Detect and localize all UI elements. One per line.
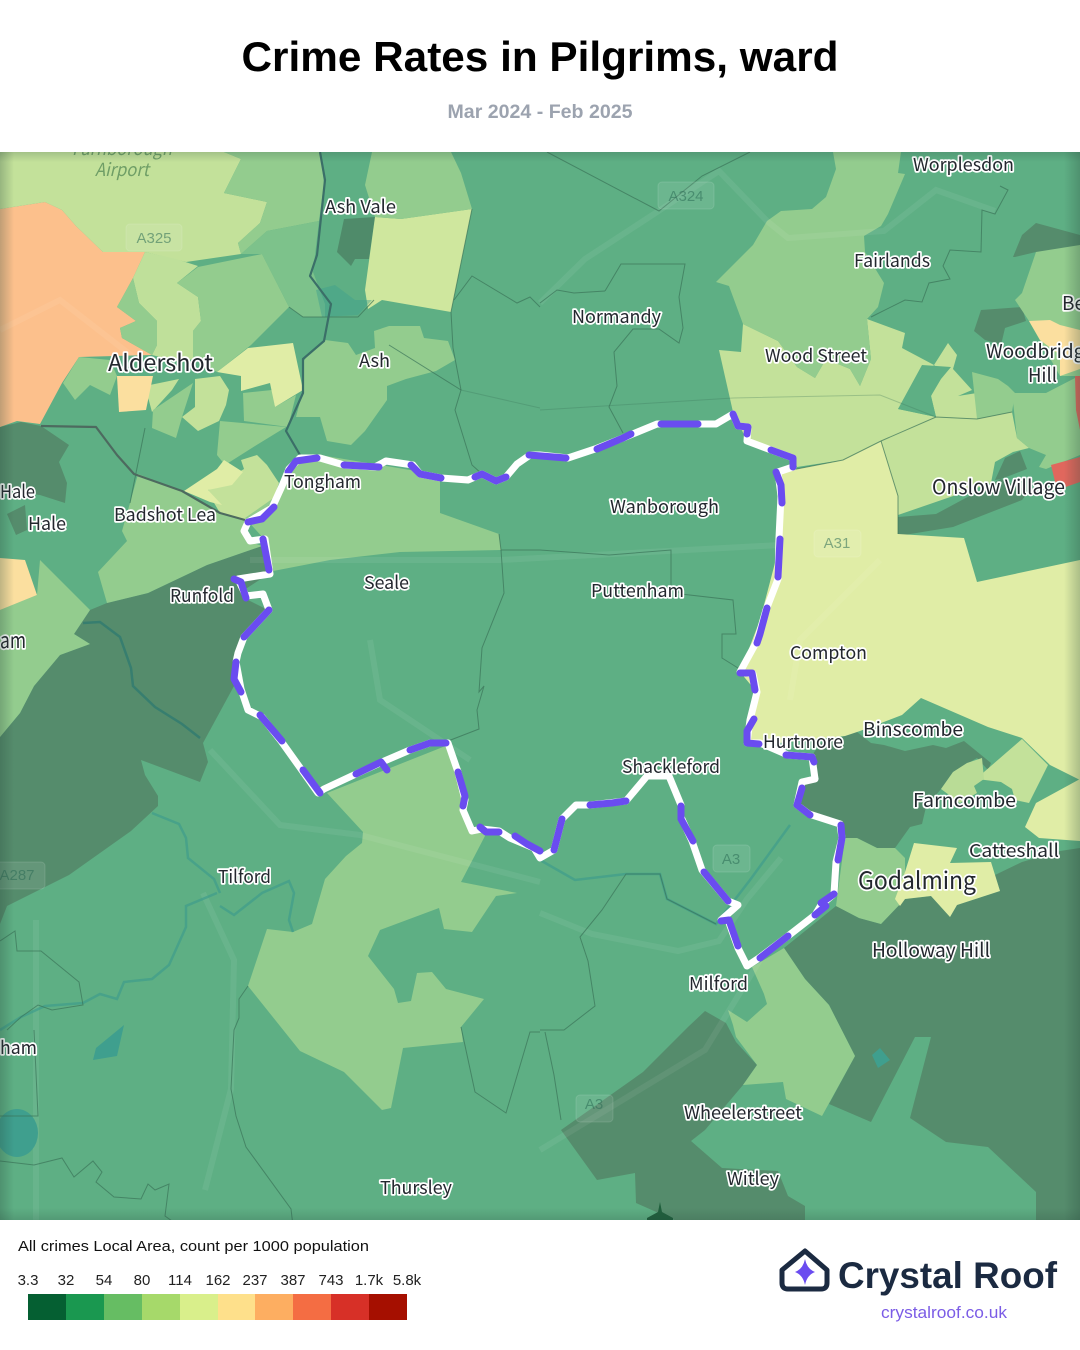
map: roads (0, 171, 995, 1220)
map: ward boundary lines (0, 152, 1012, 1226)
map: place labels (0, 151, 1080, 1200)
map: place labels: Wood Street (765, 342, 867, 368)
map: place labels: Binscombe (863, 715, 963, 742)
logo: Crystal Roof (782, 1251, 1058, 1322)
map: rivers and ponds (0, 285, 890, 1157)
map: area shading by crime rate (0, 152, 1080, 1226)
legend tick labels: 743 (318, 1272, 344, 1289)
legend tick labels: 162 (205, 1272, 231, 1289)
map: place labels: Fairlands (854, 247, 930, 273)
legend tick labels: 237 (242, 1272, 268, 1289)
legend tick labels: 54 (96, 1272, 112, 1289)
map: place labels: Normandy (572, 303, 662, 329)
icon: house with star (782, 1251, 827, 1289)
map: county boundary (41, 152, 331, 520)
map: place labels: Farncombe (913, 786, 1016, 813)
map: road number shields: A325 (136, 230, 172, 247)
map: road number shields (0, 182, 861, 1122)
map: road number shields: A287 (0, 867, 35, 884)
map: place labels: Catteshall (969, 837, 1059, 863)
map: place labels: Ash Vale (325, 193, 396, 219)
map: place labels: Hale (28, 510, 66, 536)
map: road number shields: A3 (722, 851, 740, 868)
map: place labels: Compton (790, 639, 867, 665)
legend tick labels: 1.7k (355, 1272, 384, 1289)
map: road number shields: A3 (585, 1096, 603, 1113)
map: place labels: Godalming (858, 861, 976, 896)
legend title: All crimes Local Area, count per 1000 population (18, 1238, 369, 1255)
ward outline: purple dashes (234, 414, 842, 958)
legend colour bar (28, 1294, 407, 1320)
map: Farnborough Airport label: Airport (95, 156, 151, 182)
map: Pilgrims ward outline (234, 414, 842, 966)
map: place labels: ham (0, 1034, 37, 1060)
map: place labels: Thursley (380, 1174, 453, 1200)
map: place labels: Puttenham (591, 577, 684, 603)
map: place labels: Tongham (284, 468, 361, 494)
map: place labels: Milford (689, 970, 748, 996)
map: place labels: Aldershot (108, 344, 213, 378)
map: place labels: Hurtmore (763, 728, 843, 754)
map: place labels: Witley (727, 1165, 780, 1191)
map: place labels: Shackleford (622, 753, 720, 779)
legend tick labels: 5.8k (393, 1272, 422, 1289)
area: Wood Street inner green (898, 365, 951, 417)
map: place labels: Runfold (170, 582, 234, 608)
legend (18, 1238, 422, 1320)
legend tick labels: 32 (58, 1272, 74, 1289)
map: place labels: Seale (364, 569, 409, 595)
legend tick labels (18, 1272, 422, 1289)
legend tick labels: 387 (280, 1272, 306, 1289)
map: road number shields: A31 (824, 535, 850, 552)
map: place labels: Hill (1028, 361, 1057, 388)
map: Farnborough Airport label: Farnborough (72, 135, 173, 161)
area: Aldershot orange (0, 202, 152, 427)
legend tick labels: 3.3 (18, 1272, 38, 1289)
map: place labels: Hale (0, 478, 35, 504)
map: place labels: Onslow Village (932, 471, 1065, 500)
title: Crime Rates in Pilgrims, ward (242, 33, 838, 80)
subtitle: date range: Mar 2024 - Feb 2025 (448, 102, 633, 123)
map: road number shields: A324 (668, 188, 704, 205)
map: place labels: Ash (359, 347, 390, 373)
map: place labels: Wanborough (610, 493, 719, 519)
map: edge vignette (0, 152, 1080, 1220)
logo url: crystalroof.co.uk (881, 1304, 1008, 1322)
map: place labels: am (0, 625, 26, 655)
legend tick labels: 114 (168, 1272, 192, 1289)
map: place labels: Worplesdon (913, 151, 1014, 177)
map: place labels: Badshot Lea (114, 501, 216, 527)
map: place labels: Tilford (218, 863, 271, 889)
legend tick labels: 80 (134, 1272, 150, 1289)
logo wordmark: Crystal Roof (838, 1255, 1058, 1296)
map: place labels: Wheelerstreet (684, 1099, 802, 1125)
icon: airfield (647, 1202, 673, 1221)
map: Farnborough Airport label (74, 152, 172, 180)
map: place labels: Holloway Hill (872, 936, 990, 963)
